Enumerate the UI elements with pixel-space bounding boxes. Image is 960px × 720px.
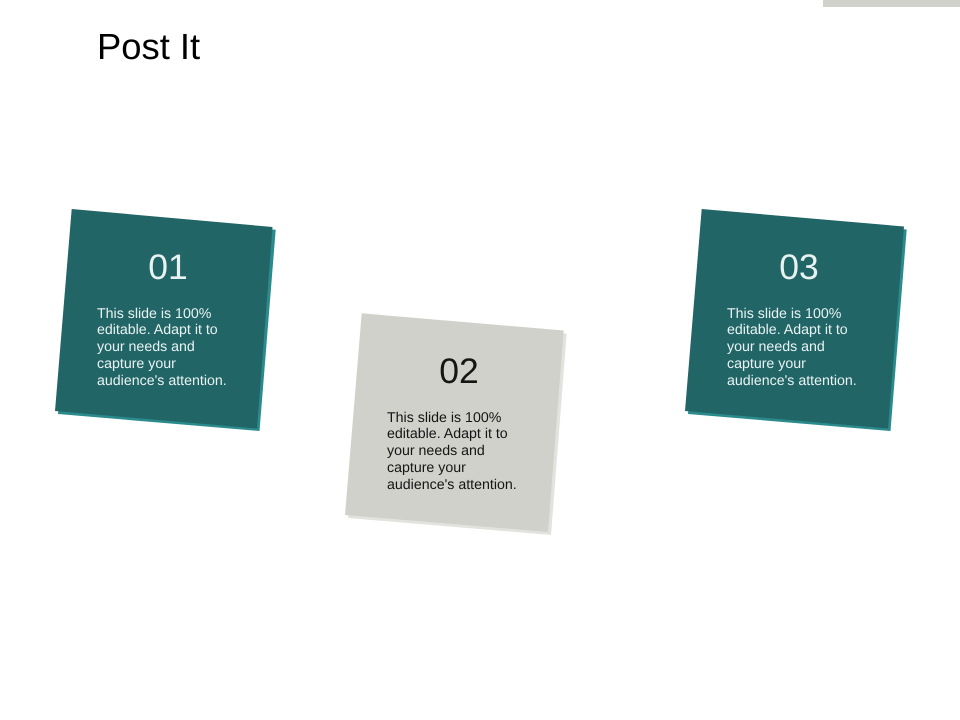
card 02 number: 02 [439, 351, 479, 391]
card 02 text: capture your [387, 460, 466, 476]
card 03 text: This slide is 100% [727, 306, 841, 322]
panel: card 01 [55, 209, 276, 431]
card 01 text: audience's attention. [97, 373, 227, 389]
top right accent bar [823, 0, 960, 7]
card 02 text [387, 410, 517, 493]
card 02 text: your needs and [387, 443, 485, 459]
card 03 text: editable. Adapt it to [727, 322, 848, 338]
card 01 text: This slide is 100% [97, 306, 211, 322]
card 03 number: 03 [779, 247, 819, 287]
card 03 text: your needs and [727, 339, 825, 355]
card 03 text: capture your [727, 356, 806, 372]
card 03 text: audience's attention. [727, 373, 857, 389]
card 02 text: editable. Adapt it to [387, 426, 508, 442]
panel: card 02 [345, 313, 567, 535]
card 02 shape [345, 313, 567, 535]
card 01 text: your needs and [97, 339, 195, 355]
panel: card 03 [685, 209, 907, 431]
card 02 text: audience's attention. [387, 477, 517, 493]
card 01 number: 01 [148, 247, 188, 287]
card 01 text [97, 306, 227, 389]
title: Post It [97, 26, 200, 67]
card 03 shape [685, 209, 907, 431]
card 03 text [727, 306, 857, 389]
card 01 shape [55, 209, 276, 431]
card 01 text: capture your [97, 356, 176, 372]
card 01 text: editable. Adapt it to [97, 322, 218, 338]
card 02 text: This slide is 100% [387, 410, 501, 426]
